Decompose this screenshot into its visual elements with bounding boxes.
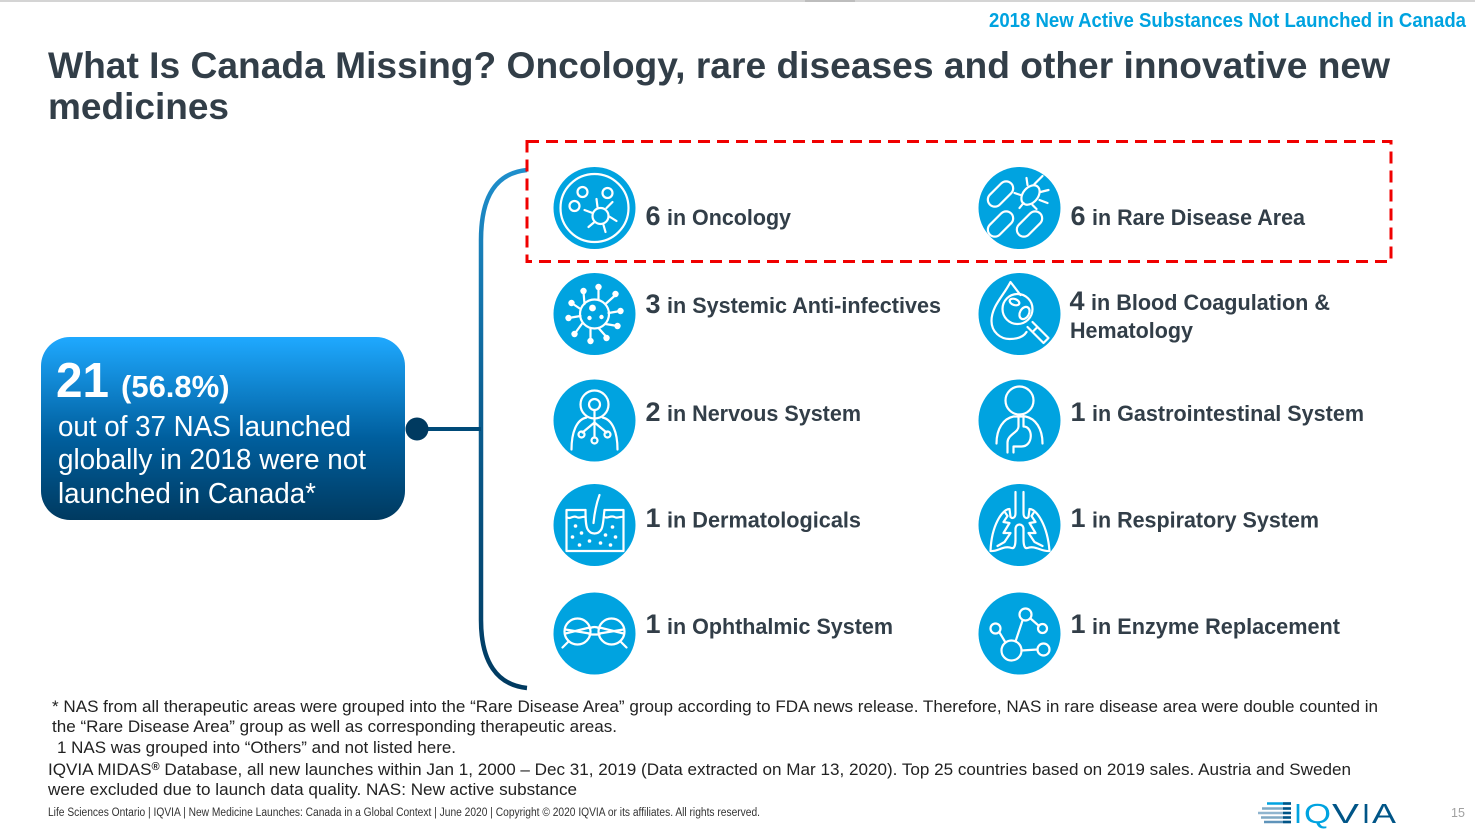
callout: 21 of 37 NAS: out of 37 NAS launched <box>58 411 351 443</box>
footnotes: the “Rare Disease Area” group as well as corresponding therapeutic areas. <box>52 717 617 736</box>
logo: IQVIA: I <box>1294 798 1302 829</box>
logo: IQVIA: A <box>1372 798 1396 829</box>
item: blood coagulation <box>1070 286 1330 343</box>
footer citation: Life Sciences Ontario | IQVIA | New Medicine Launches: Canada in a Global Context | June 2020 | Copyright © 2020 IQVIA or its affiliates. All rights reserved. <box>48 807 760 819</box>
footnotes: IQVIA MIDAS <box>48 760 151 779</box>
item: systemic anti-infectives: 3 <box>646 289 661 319</box>
connector bracket <box>406 170 527 688</box>
item: nervous system: in Nervous System <box>667 401 861 426</box>
item: respiratory system: in Respiratory System <box>1092 508 1319 532</box>
icon: rare disease <box>978 167 1060 249</box>
footnotes <box>47 697 1378 799</box>
item: gastrointestinal system: in Gastrointestinal System <box>1092 401 1364 426</box>
item: respiratory system: 1 <box>1070 503 1086 533</box>
page number: 15 <box>1451 806 1465 820</box>
callout: 21 of 37 NAS <box>41 337 405 520</box>
icon: gastrointestinal system <box>978 380 1060 462</box>
item: gastrointestinal system: 1 <box>1070 397 1086 427</box>
footnotes: were excluded due to launch data quality. NAS: New active substance <box>47 780 577 799</box>
icon: dermatologicals <box>554 484 636 566</box>
item: blood coagulation: Hematology <box>1070 318 1194 343</box>
icon: blood coagulation <box>978 273 1060 355</box>
callout: 21 of 37 NAS: launched in Canada* <box>58 478 316 510</box>
item: oncology: 6 <box>646 201 661 231</box>
title: medicines <box>48 86 229 127</box>
item: rare disease: in Rare Disease Area <box>1092 205 1306 230</box>
callout: 21 of 37 NAS: 21 <box>56 354 109 408</box>
footnotes: * NAS from all therapeutic areas were grouped into the “Rare Disease Area” group according to FDA news release. Therefore, NAS in rare disease area were double counted in <box>52 697 1378 716</box>
icon: nervous system <box>554 380 636 462</box>
icon: systemic anti-infectives <box>554 273 636 355</box>
item: enzyme replacement: in Enzyme Replacement <box>1092 614 1341 639</box>
item: rare disease: 6 <box>1070 201 1086 231</box>
item: nervous system: 2 <box>646 397 661 427</box>
icon: enzyme replacement <box>978 592 1060 674</box>
logo: IQVIA <box>1258 798 1396 829</box>
item: dermatologicals: 1 <box>646 503 661 533</box>
item: dermatologicals: in Dermatologicals <box>667 508 861 532</box>
highlight box: oncology and rare disease <box>527 142 1391 262</box>
item: blood coagulation: 4 <box>1070 286 1085 316</box>
item: ophthalmic system: in Ophthalmic System <box>667 614 893 639</box>
item: oncology: in Oncology <box>667 205 792 230</box>
callout: 21 of 37 NAS: globally in 2018 were not <box>58 444 366 476</box>
callout: 21 of 37 NAS: (56.8%) <box>121 369 230 404</box>
icon: ophthalmic system <box>554 592 636 674</box>
icon: respiratory system <box>978 484 1060 566</box>
item: blood coagulation: in Blood Coagulation & <box>1091 290 1330 315</box>
title <box>48 45 1390 127</box>
logo: IQVIA: I <box>1362 798 1370 829</box>
footnotes: Database, all new launches within Jan 1, 2000 – Dec 31, 2019 (Data extracted on Mar 13, 2020). Top 25 countries based on 2019 sales. Austria and Sweden <box>160 760 1351 779</box>
title: What Is Canada Missing? Oncology, rare diseases and other innovative new <box>48 45 1390 86</box>
footnotes: 1 NAS was grouped into “Others” and not listed here. <box>57 738 456 757</box>
logo: IQVIA: V <box>1332 798 1359 829</box>
item: enzyme replacement: 1 <box>1070 609 1086 639</box>
logo: IQVIA: Q <box>1304 798 1331 829</box>
footnotes: ® <box>151 761 160 773</box>
item: systemic anti-infectives: in Systemic Anti-infectives <box>667 293 941 318</box>
icon: oncology <box>554 167 636 249</box>
item: ophthalmic system: 1 <box>646 609 661 639</box>
